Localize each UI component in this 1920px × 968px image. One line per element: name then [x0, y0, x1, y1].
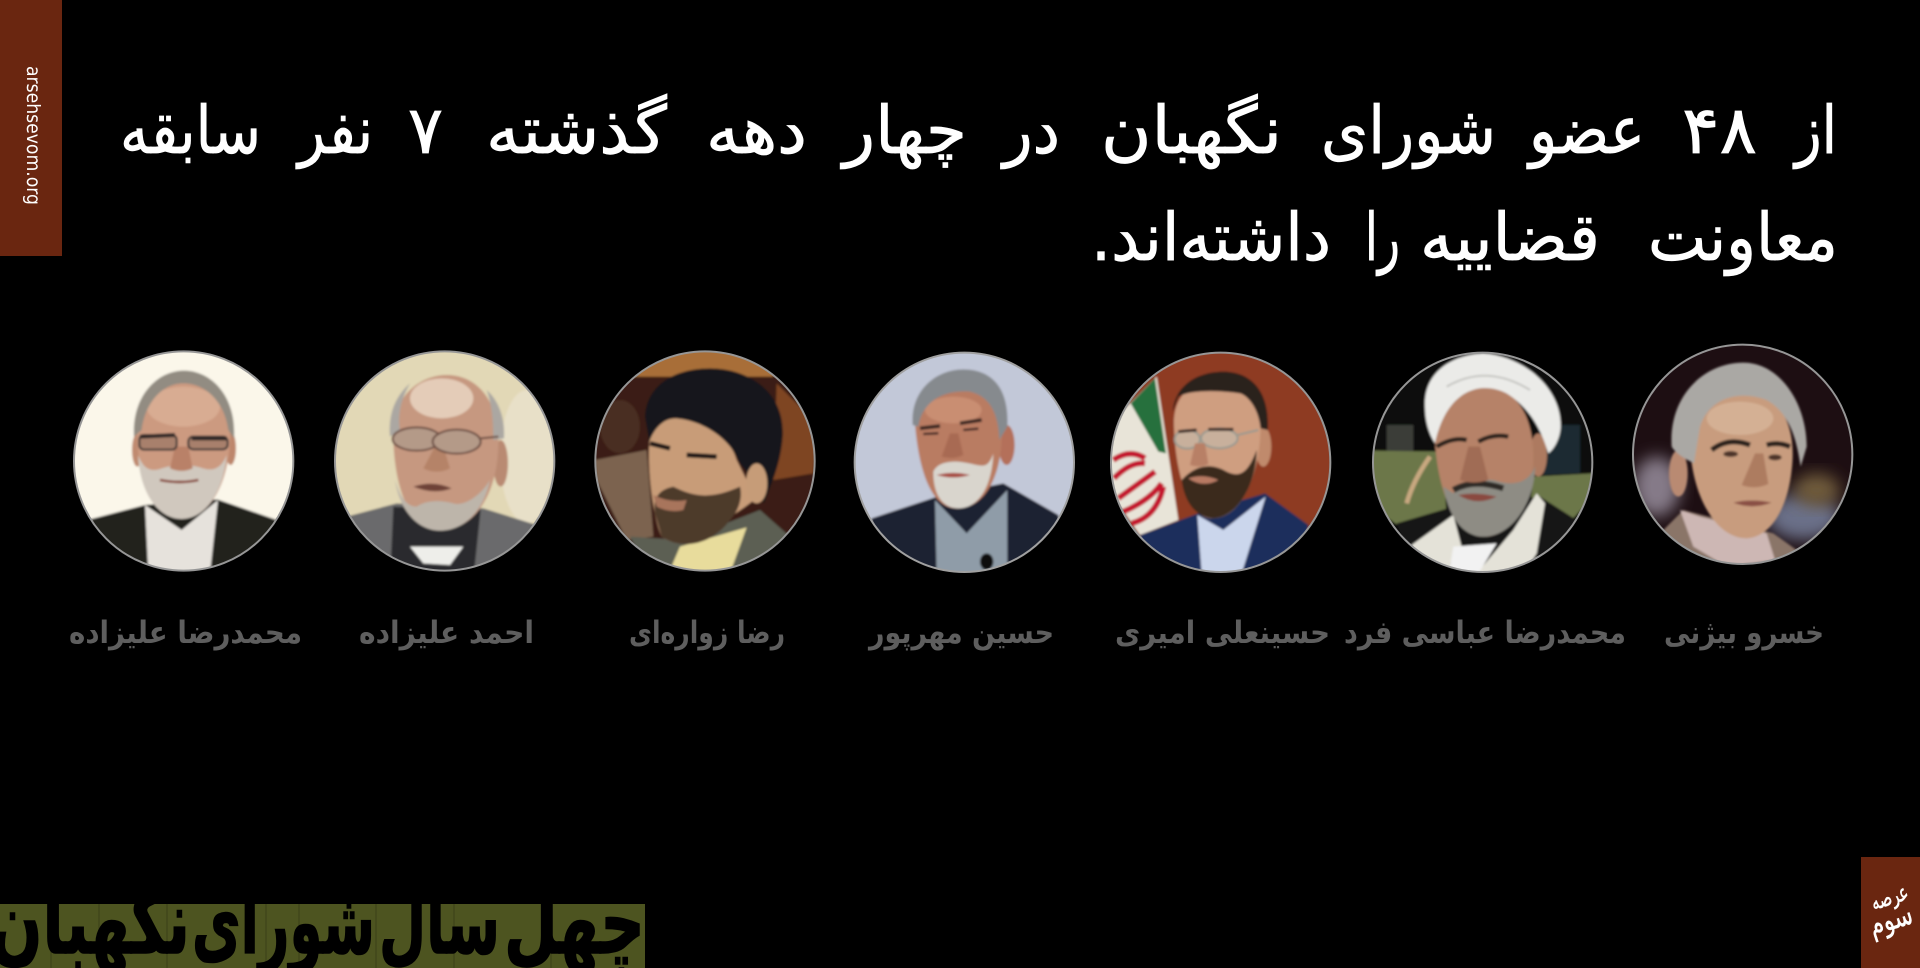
- name: Khosrow Bijani: خسرو بیژنی: [1664, 615, 1824, 651]
- title: نفر: [295, 92, 373, 169]
- title: چهار: [840, 92, 967, 169]
- side tab: website: arsehsevom.org: [22, 66, 44, 205]
- portrait: Mohammadreza Alizadeh: [70, 347, 300, 580]
- title: قضاییه: [1420, 199, 1600, 276]
- name: Mohammadreza Alizadeh: محمدرضا علیزاده: [69, 615, 302, 651]
- title: سابقه: [120, 92, 261, 169]
- title: معاونت: [1648, 199, 1838, 276]
- title: نگهبان: [1101, 92, 1282, 169]
- title: عضو: [1526, 92, 1645, 169]
- portrait: Hossein Mehrpour: [850, 347, 1080, 580]
- portrait: Reza Zavarei: [590, 347, 823, 580]
- title: گذشته: [486, 92, 668, 169]
- portrait: Ahmad Alizadeh: [330, 347, 560, 580]
- title: ۷: [408, 92, 443, 169]
- title: شورای: [1321, 92, 1496, 169]
- portrait: Hosseinali Amiri: [1107, 347, 1340, 580]
- name: Reza Zavarei: رضا زواره‌ای: [629, 615, 785, 651]
- logo tile: [1859, 857, 1920, 968]
- side tab: website: [0, 0, 62, 256]
- title: دهه: [706, 92, 807, 169]
- title: [120, 92, 1838, 276]
- title: در: [1000, 92, 1060, 169]
- name: Hossein Mehrpour: حسین مهرپور: [867, 615, 1054, 651]
- name: Hosseinali Amiri: حسینعلی امیری: [1115, 615, 1330, 651]
- name: Ahmad Alizadeh: احمد علیزاده: [359, 615, 534, 651]
- name: Mohammadreza Abbasifard: محمدرضا عباسی فرد: [1344, 615, 1626, 651]
- title: را: [1365, 199, 1400, 276]
- title: از: [1792, 92, 1837, 169]
- portrait: Mohammadreza Abbasifard: [1370, 347, 1600, 580]
- series banner: [0, 904, 645, 968]
- title: داشته‌اند.: [1091, 199, 1331, 276]
- title: ۴۸: [1682, 92, 1757, 169]
- portrait: Khosrow Bijani: [1630, 343, 1857, 570]
